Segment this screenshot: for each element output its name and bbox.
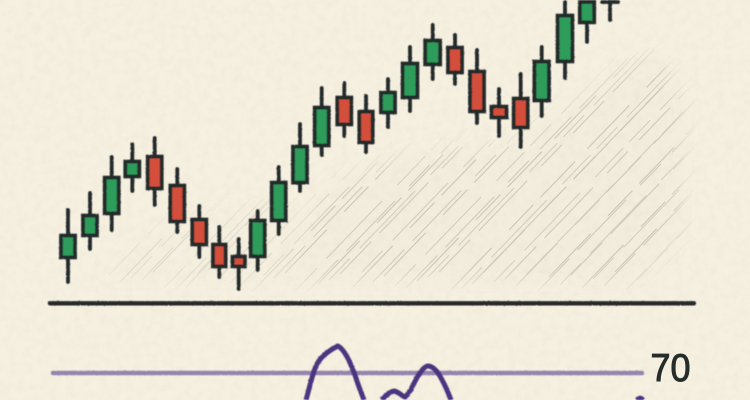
candle 17 green <box>403 47 417 111</box>
candle 9 red <box>232 239 245 289</box>
candle 24 green <box>558 2 572 78</box>
candle 14 red <box>337 83 351 136</box>
candle 21 red <box>492 89 506 136</box>
candle 23 green <box>534 47 549 116</box>
candle 6 red <box>170 169 184 232</box>
candle 7 red <box>192 206 206 257</box>
candle 5 red <box>148 138 162 205</box>
candle 26 cut off at top <box>602 2 618 20</box>
candle 11 green <box>272 167 286 234</box>
candle 4 green <box>125 144 139 191</box>
chart divider baseline <box>50 301 694 305</box>
candle 20 red <box>470 50 484 123</box>
RSI curve <box>306 346 643 400</box>
label: RSI 70: 70 <box>650 347 690 390</box>
candle 3 green <box>105 157 119 230</box>
candle 18 green <box>425 25 440 79</box>
candle 10 green <box>251 211 265 270</box>
candle 13 green <box>315 88 329 155</box>
candlestick chart <box>61 2 618 289</box>
candle 15 red <box>359 96 373 152</box>
pencil hatching shade <box>109 49 692 291</box>
candle 2 green <box>83 193 97 249</box>
candle 22 red <box>514 74 528 147</box>
candle 12 green <box>293 124 307 191</box>
RSI 70 level line <box>53 371 642 375</box>
candle 25 green <box>580 2 594 42</box>
candle 8 red <box>213 227 226 277</box>
candle 1 green <box>61 210 75 282</box>
candle 16 green <box>381 79 395 127</box>
candle 19 red <box>448 35 462 84</box>
